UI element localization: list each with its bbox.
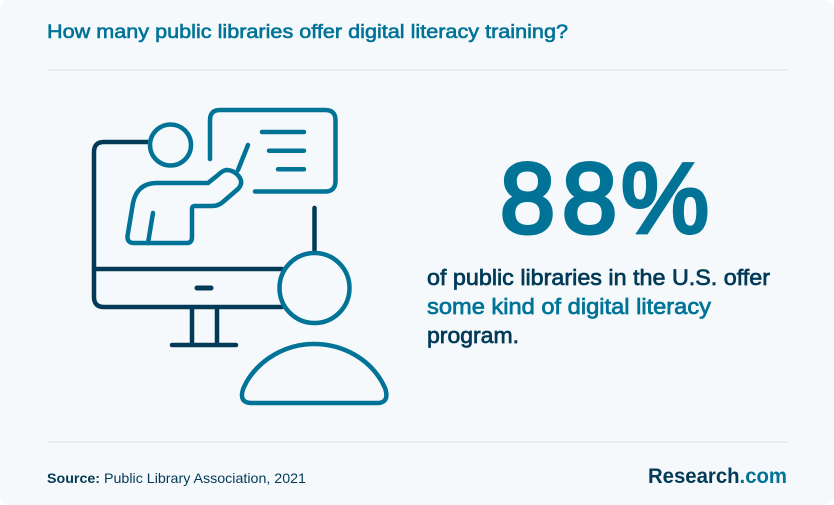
title: How many public libraries offer digital literacy training? [47,21,568,43]
icon part: viewer [242,253,386,403]
logo: Research.com [648,465,787,488]
icon part: monitor [94,142,314,345]
description [427,265,770,348]
source: Source: Public Library Association, 2021 [47,470,306,486]
description: some kind of digital literacy [427,294,711,319]
big number: 88% [500,142,709,254]
icon: online teacher on a monitor with a viewer [94,110,386,403]
description: of public libraries in the U.S. offer [427,265,770,290]
icon part: presentation board [210,110,336,192]
icon part: teacher [127,124,248,243]
description: program. [427,323,519,348]
